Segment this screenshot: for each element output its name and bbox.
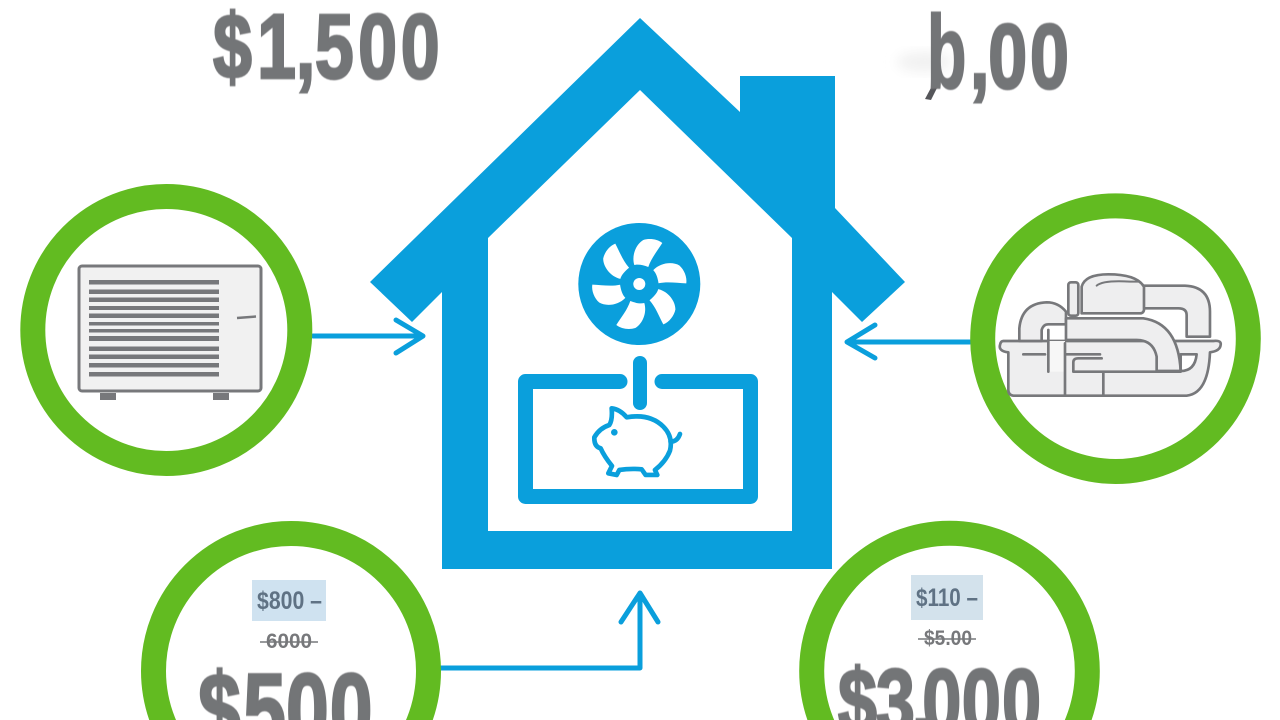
heading: top right amount xyxy=(897,0,1069,111)
savings box with slot xyxy=(526,356,750,496)
panel: air conditioner circle xyxy=(33,196,300,464)
price tag: $110 – xyxy=(916,584,978,612)
house outline with chimney xyxy=(370,18,905,569)
icon: ventilation fan xyxy=(578,223,700,345)
icon: pipes and basin xyxy=(1000,274,1221,396)
arrow: air conditioner to house xyxy=(313,320,423,353)
arrow: pipes to house xyxy=(847,325,970,358)
icon: outdoor air conditioning unit xyxy=(79,266,261,400)
struck-through price: 6000 xyxy=(266,630,312,653)
price tag: $800 – xyxy=(257,587,322,615)
struck-through price: $5.00 xyxy=(924,627,972,650)
heading: top right amount: ,00 xyxy=(970,6,1069,108)
arrow: lower savings to house xyxy=(441,593,658,668)
panel: lower left savings circle xyxy=(154,534,428,720)
price tag xyxy=(911,575,983,620)
icon: piggy bank xyxy=(594,408,680,475)
price tag xyxy=(252,580,326,621)
panel: plumbing circle xyxy=(983,206,1248,471)
panel: lower right savings circle xyxy=(812,533,1087,720)
